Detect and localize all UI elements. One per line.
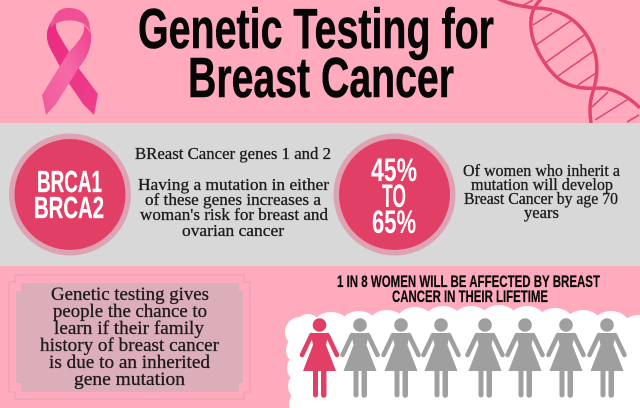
figure 5: [468, 318, 502, 398]
badge: 45% to 65%: [334, 134, 456, 256]
pictogram: eight women: [302, 318, 624, 398]
text: BRCA explanation: ovarian cancer: [182, 221, 285, 240]
text: genetic testing description: Genetic testing gives: [51, 285, 209, 305]
title: [138, 0, 494, 110]
text: risk statement: Of women who inherit a: [463, 161, 621, 180]
text: genetic testing description: gene mutation: [74, 370, 185, 390]
panel: gene facts band: [0, 123, 640, 266]
text: BRCA explanation: BReast Cancer genes 1 and 2: [135, 144, 331, 163]
text: risk statement: Breast Cancer by age 70: [464, 189, 618, 208]
figure 1 highlighted: [302, 318, 337, 398]
panel: 1 in 8 statistic: [285, 272, 640, 408]
text: BRCA explanation: of these genes increases a: [145, 190, 322, 209]
figure 2: [342, 318, 378, 398]
text: genetic testing description: is due to an inherited: [49, 353, 211, 373]
text: genetic testing description: history of breast cancer: [40, 336, 219, 356]
figure 4: [424, 318, 458, 398]
white cloud backdrop: [285, 305, 640, 408]
figure 6: [508, 318, 542, 398]
panel: genetic testing callout: [9, 275, 250, 399]
badge: BRCA1 BRCA2: BRCA2: [34, 190, 104, 225]
badge: 45% to 65%: TO: [382, 178, 406, 214]
text: BRCA explanation: Having a mutation in either: [138, 175, 330, 194]
text: risk statement: years: [524, 203, 559, 222]
text: risk statement: mutation will develop: [471, 175, 613, 194]
header section: [42, 0, 640, 123]
badge: BRCA1 BRCA2: BRCA1: [37, 164, 102, 199]
text: genetic testing description: learn if their family: [54, 319, 205, 339]
text: BRCA explanation: woman's risk for breast and: [140, 205, 329, 224]
badge: 45% to 65%: 65%: [372, 204, 416, 240]
icon: pink ribbon: [42, 8, 98, 115]
icon: DNA helix: [497, 0, 640, 123]
badge: 45% to 65%: 45%: [371, 152, 417, 188]
heading: 1 in 8 women: CANCER IN THEIR LIFETIME: [392, 287, 548, 306]
figure 7: [548, 318, 584, 398]
heading: 1 in 8 women: [337, 272, 600, 306]
text: genetic testing description: people the chance to: [53, 302, 207, 322]
figure 8: [590, 318, 624, 398]
text: genetic testing description: [40, 285, 219, 390]
title: Breast Cancer: [188, 46, 454, 110]
badge: BRCA1 BRCA2: [9, 134, 131, 256]
text: risk statement: [463, 161, 621, 222]
text: BRCA explanation: [135, 144, 331, 240]
figure 3: [384, 318, 418, 398]
